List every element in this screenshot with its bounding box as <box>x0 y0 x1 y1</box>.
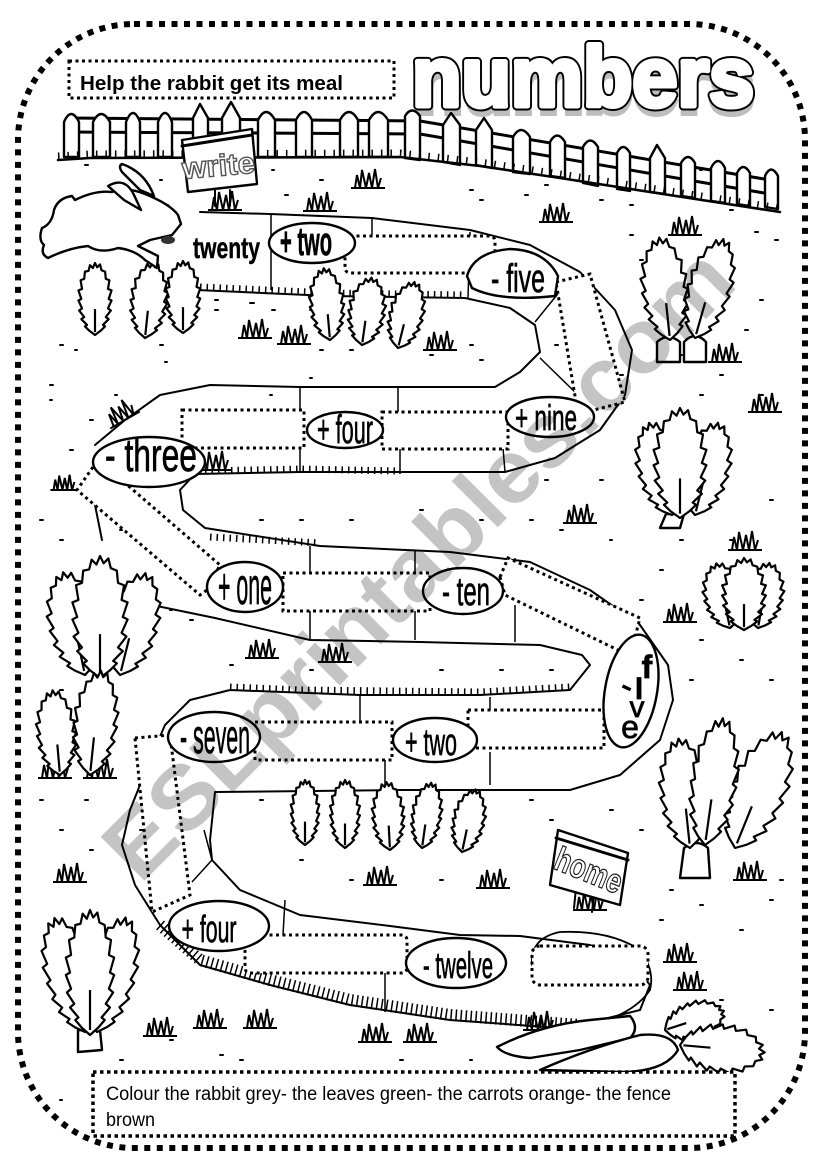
carrot plants: centre lower row <box>291 780 491 855</box>
colouring instruction box: brown <box>106 1110 155 1131</box>
operation: - three <box>93 429 205 487</box>
answer box 7 <box>500 558 640 652</box>
instruction box <box>69 61 394 98</box>
answer box 9 <box>255 722 392 760</box>
operation: - three: - three <box>105 429 197 481</box>
operation: - twelve: - twelve <box>423 945 493 986</box>
operation: + two lower: + two <box>405 722 457 764</box>
sign: home: home <box>549 840 628 902</box>
title: numbers: numbers <box>412 30 754 124</box>
sign: write: write <box>180 147 256 186</box>
carrot plants: centre top row <box>307 267 431 352</box>
colouring instruction box: Colour the rabbit grey- the leaves green- the carrots orange- the fence <box>106 1084 671 1105</box>
sign: write <box>180 129 257 206</box>
answer box 8 <box>468 710 604 748</box>
operation: - five vertical <box>595 630 667 752</box>
carrots <box>497 993 767 1076</box>
operation: + one <box>207 558 283 616</box>
operation: - ten <box>423 568 503 614</box>
operation: + four lower: + four <box>182 909 237 951</box>
carrot plant: right bottom <box>654 715 807 878</box>
carrot plant: left lower <box>33 668 123 777</box>
answer box 4 <box>382 412 508 449</box>
operation: - five vertical: v <box>630 691 644 724</box>
operation: - five: - five <box>491 257 545 301</box>
winding road edges <box>93 212 673 1028</box>
operation: - twelve <box>406 938 506 988</box>
label: twenty: twenty <box>193 232 260 265</box>
operation: - seven <box>168 711 260 764</box>
answer box 1 <box>345 236 495 273</box>
operation: - five vertical: - <box>614 666 641 706</box>
operation: + nine: + nine <box>515 397 577 438</box>
operation: - five vertical: f <box>642 649 653 685</box>
operation: - five vertical: l <box>635 673 643 706</box>
operation: - ten: - ten <box>442 570 490 614</box>
answer box 11 <box>245 935 407 973</box>
grass tufts <box>38 169 782 1042</box>
operation: + four lower <box>169 901 269 951</box>
fence <box>58 102 780 212</box>
carrot plant: bottom left <box>31 910 149 1052</box>
instruction box: Help the rabbit get its meal <box>80 73 343 95</box>
operation: + four <box>307 408 383 452</box>
operation: + four: + four <box>317 408 373 452</box>
ground speckles <box>40 165 783 1100</box>
meal patch outline <box>532 932 651 1022</box>
operation: - five <box>467 249 558 301</box>
operation: - seven: - seven <box>180 711 250 764</box>
colouring instruction box <box>93 1072 735 1136</box>
answer box 12 <box>532 946 648 985</box>
operation: - five vertical: e <box>621 709 639 745</box>
answer box 2 <box>556 274 625 414</box>
carrot plants: top left row <box>78 260 200 340</box>
watermark: ESLprintables.com <box>83 229 754 899</box>
title: numbers: numbers <box>414 37 754 131</box>
operation: + two lower <box>393 718 477 764</box>
answer box 10 <box>135 735 190 912</box>
title: numbers: numbers <box>412 30 754 124</box>
operation: + two: + two <box>280 220 332 264</box>
carrot plant: right lower <box>697 558 789 632</box>
rabbit <box>40 164 181 268</box>
answer box 5 <box>77 467 220 595</box>
carrot plant: left upper <box>38 556 170 681</box>
answer box 3 <box>182 410 304 448</box>
carrot plant: upper right <box>636 233 744 362</box>
carrot plant: right middle <box>627 408 740 528</box>
worksheet: numbers rabbit maze: + one <box>218 558 272 616</box>
answer box 6 <box>283 573 430 611</box>
operation: + two <box>269 220 355 264</box>
